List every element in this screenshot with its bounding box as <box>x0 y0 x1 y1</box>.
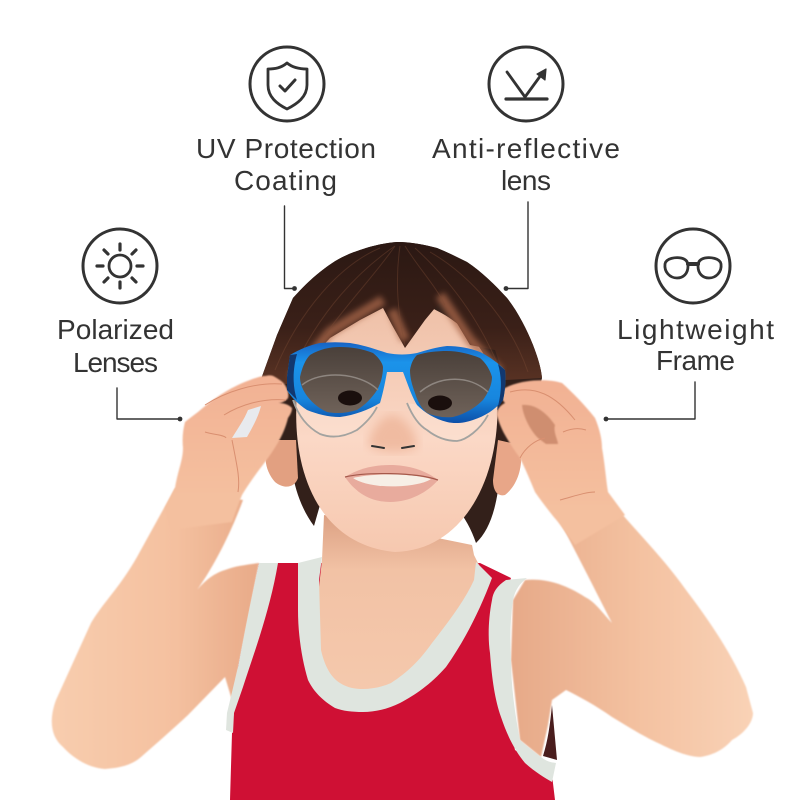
bifocal arcs <box>302 375 488 392</box>
feature: UV Protection Coating <box>196 47 376 291</box>
mouth line <box>345 474 438 480</box>
dark gap under right arm <box>543 705 557 760</box>
right hand <box>497 380 625 545</box>
feature: UV Protection Coating: Coating <box>234 165 337 196</box>
right finger creases <box>510 390 595 500</box>
right hand folded fingers shadow <box>522 405 558 444</box>
leader line <box>604 382 695 421</box>
frame dark ends <box>287 354 505 410</box>
tank top right strap trim <box>489 578 556 782</box>
clear inner lens right <box>407 403 488 441</box>
fringe <box>260 242 542 384</box>
right arm <box>511 500 753 757</box>
clear inner lens left <box>293 400 377 437</box>
teeth <box>353 474 431 486</box>
fringe warm highlights <box>292 295 500 378</box>
left ear <box>266 440 298 487</box>
label: Anti-reflective <box>432 133 620 164</box>
tank top <box>230 563 555 800</box>
nostrils <box>372 446 414 448</box>
left hand finger gap <box>232 406 261 438</box>
hair strands <box>275 246 528 372</box>
tank top left strap trim <box>226 563 278 733</box>
photo: boy wearing blue sunglasses <box>52 242 753 800</box>
sunglasses left lens <box>300 347 383 413</box>
left finger creases <box>205 384 286 492</box>
leader line <box>117 388 182 421</box>
leader line <box>284 206 297 291</box>
feature: Anti-reflective lens: lens <box>501 165 551 196</box>
sunglasses frame <box>287 342 505 423</box>
mouth <box>345 465 438 502</box>
icon: glasses <box>656 229 730 303</box>
right eye <box>428 396 452 410</box>
label: Lightweight <box>617 314 774 345</box>
back hair <box>260 242 542 543</box>
feature: Lightweight Frame <box>604 229 774 421</box>
icon: shield with check <box>250 47 324 121</box>
left eye <box>338 390 362 406</box>
nose <box>368 415 418 452</box>
feature: Anti-reflective lens <box>432 47 620 291</box>
icon: reflection arrow <box>489 47 563 121</box>
left hand <box>165 375 292 530</box>
sunglasses right lens <box>410 351 492 417</box>
face <box>296 300 497 552</box>
neck and chest <box>312 515 484 700</box>
left arm <box>52 488 259 769</box>
icon: sun <box>83 229 157 303</box>
feature: Lightweight Frame: Frame <box>656 345 735 376</box>
feature: Polarized Lenses: Lenses <box>73 347 158 378</box>
label: Polarized <box>57 314 174 345</box>
leader line <box>504 202 528 291</box>
tank top neckline trim <box>298 557 492 712</box>
label: UV Protection <box>196 133 376 164</box>
right ear <box>493 440 521 495</box>
feature: Polarized Lenses <box>57 229 182 421</box>
